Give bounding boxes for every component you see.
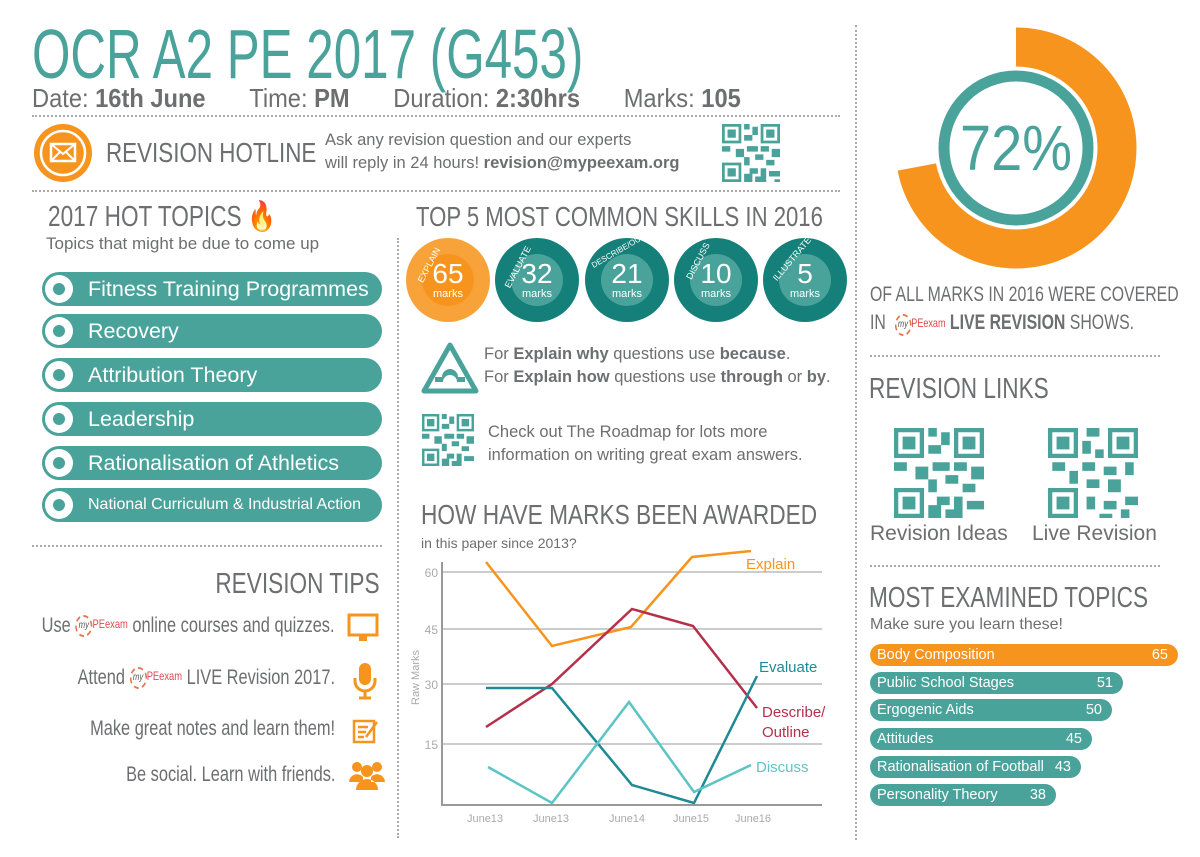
line chart: Discuss (756, 759, 809, 776)
skill: describe: DESCRIBE/OUTLINE (590, 223, 662, 270)
qr: live revision (1032, 428, 1157, 545)
line chart: June13 (533, 813, 569, 825)
top 5 skills heading: TOP 5 MOST COMMON SKILLS IN 2016 (416, 201, 823, 232)
line chart: Evaluate (759, 659, 817, 676)
donut caption: my (898, 319, 908, 330)
line chart: 45 (425, 623, 438, 637)
title: OCR A2 PE 2017 (G453) (32, 15, 583, 93)
bar: public school (870, 672, 1123, 694)
most examined subtitle: Make sure you learn these! (870, 616, 1063, 633)
pill: rationalisation (42, 446, 382, 480)
skill: discuss: DISCUSS (684, 241, 712, 281)
revision links heading: REVISION LINKS (869, 373, 1049, 405)
roadmap text: information on writing great exam answers. (488, 446, 803, 464)
explain tip text: For Explain how questions use through or by. (484, 368, 831, 386)
line chart: Describe/ (762, 704, 826, 721)
skill: illustrate: ILLUSTRATE (771, 235, 813, 283)
skill: evaluate: marks (522, 288, 552, 300)
line chart: 15 (425, 738, 438, 752)
hotline heading: REVISION HOTLINE (106, 137, 316, 168)
marks awarded subtitle: in this paper since 2013? (421, 535, 577, 551)
donut caption: OF ALL MARKS IN 2016 WERE COVERED (870, 283, 1179, 306)
bar: public school: 51 (1097, 675, 1113, 691)
bar: personality: Personality Theory (877, 787, 998, 803)
skill: illustrate: 5 (797, 258, 813, 289)
pill: fitness (42, 272, 382, 306)
dividers (32, 115, 840, 117)
donut caption: PEexam (911, 316, 946, 330)
icon: notes (352, 720, 378, 744)
bar: personality: 38 (1030, 787, 1046, 803)
bar: football: 43 (1055, 759, 1071, 775)
bar: ergogenic: Ergogenic Aids (877, 702, 974, 718)
pill: recovery: Recovery (88, 319, 179, 343)
tip 2: PEexam (147, 669, 182, 683)
skill: explain (406, 238, 490, 322)
skill: discuss (674, 238, 758, 322)
qr: roadmap (422, 414, 474, 466)
skill: explain: 65 (432, 258, 464, 289)
bar: personality (870, 784, 1056, 806)
line chart: Raw Marks (410, 649, 422, 705)
bar: attitudes (870, 728, 1092, 750)
hotline text: Ask any revision question and our experts (325, 131, 631, 149)
icon: envelope (34, 124, 92, 182)
hotline text (325, 131, 680, 172)
line chart: June14 (609, 813, 645, 825)
pill: attribution: Attribution Theory (88, 363, 257, 387)
bar: public school: Public School Stages (877, 675, 1014, 691)
line chart: 60 (425, 566, 438, 580)
pill: fitness: Fitness Training Programmes (88, 277, 369, 301)
skill: discuss: marks (701, 288, 731, 300)
most examined heading: MOST EXAMINED TOPICS (869, 582, 1148, 614)
explain tip text (484, 345, 831, 386)
skill: illustrate (763, 238, 847, 322)
donut chart: 72%: 72% (960, 112, 1072, 184)
bar: body composition: Body Composition (877, 647, 995, 663)
pill: attribution (42, 358, 382, 392)
bar: body composition (870, 644, 1178, 666)
skill: evaluate (495, 238, 579, 322)
line chart: Outline (762, 724, 810, 741)
skill: illustrate: marks (790, 288, 820, 300)
skill: evaluate: 32 (521, 258, 553, 289)
tip 1: PEexam (93, 617, 128, 631)
revision hotline (34, 124, 680, 182)
bar chart: most examined (870, 644, 1178, 806)
revision tips heading: REVISION TIPS (216, 568, 380, 600)
skill: discuss: 10 (700, 258, 732, 289)
pill: leadership (42, 402, 382, 436)
skill: describe: 21 (611, 258, 643, 289)
pill: rationalisation: Rationalisation of Athletics (88, 451, 339, 475)
qr: live revision: Live Revision (1032, 522, 1157, 545)
line chart: 30 (425, 678, 438, 692)
donut caption (870, 283, 1179, 336)
qr: hotline (722, 124, 780, 182)
roadmap text (488, 423, 803, 464)
pill: national curriculum: National Curriculum & Industrial Action (88, 496, 361, 513)
qr: revision ideas (870, 428, 1008, 545)
hotline text: will reply in 24 hours! revision@mypeexam.org (325, 154, 680, 172)
bar: football (870, 756, 1081, 778)
tip 3: Make great notes and learn them! (90, 717, 335, 740)
line chart (410, 550, 826, 825)
tip 1: Use online courses and quizzes. (42, 614, 335, 637)
pill: national curriculum (42, 488, 382, 522)
icon: bridge sign (422, 342, 478, 394)
tip 1: my (79, 620, 90, 631)
tip 2: Attend LIVE Revision 2017. (78, 666, 335, 689)
bar: body composition: 65 (1152, 647, 1168, 663)
bar: football: Rationalisation of Football (877, 759, 1044, 775)
exam details: Date: 16th June Time: PM Duration: 2:30hrs Marks: 105 (32, 83, 741, 113)
bar: attitudes: Attitudes (877, 731, 933, 747)
bar: ergogenic (870, 699, 1112, 721)
line chart: Explain (746, 556, 795, 573)
skill: describe (585, 238, 669, 322)
skill: explain: EXPLAIN (416, 246, 442, 284)
marks awarded heading: HOW HAVE MARKS BEEN AWARDED (421, 499, 817, 530)
pill: leadership: Leadership (88, 407, 194, 431)
icon: monitor (348, 614, 378, 641)
skill: describe: marks (612, 288, 642, 300)
donut chart: 72% (898, 28, 1136, 268)
line chart: June13 (467, 813, 503, 825)
skill: explain: marks (433, 288, 463, 300)
pill: recovery (42, 314, 382, 348)
icon: people (349, 762, 385, 790)
bar: attitudes: 45 (1066, 731, 1082, 747)
line chart: June15 (673, 813, 709, 825)
roadmap text: Check out The Roadmap for lots more (488, 423, 767, 441)
icon: microphone (354, 663, 376, 700)
tip 2: my (133, 672, 143, 683)
panel: hot topics (46, 200, 319, 253)
bar: ergogenic: 50 (1086, 702, 1102, 718)
skill: evaluate: EVALUATE (503, 244, 533, 290)
hot topics heading: 2017 HOT TOPICS 🔥 (48, 201, 276, 233)
line chart: June16 (735, 813, 771, 825)
explain tip text: For Explain why questions use because. (484, 345, 790, 363)
qr: revision ideas: Revision Ideas (870, 522, 1008, 545)
hot topics subtitle: Topics that might be due to come up (46, 234, 319, 253)
tip 4: Be social. Learn with friends. (126, 763, 335, 786)
donut caption: IN LIVE REVISION SHOWS. (870, 311, 1134, 334)
